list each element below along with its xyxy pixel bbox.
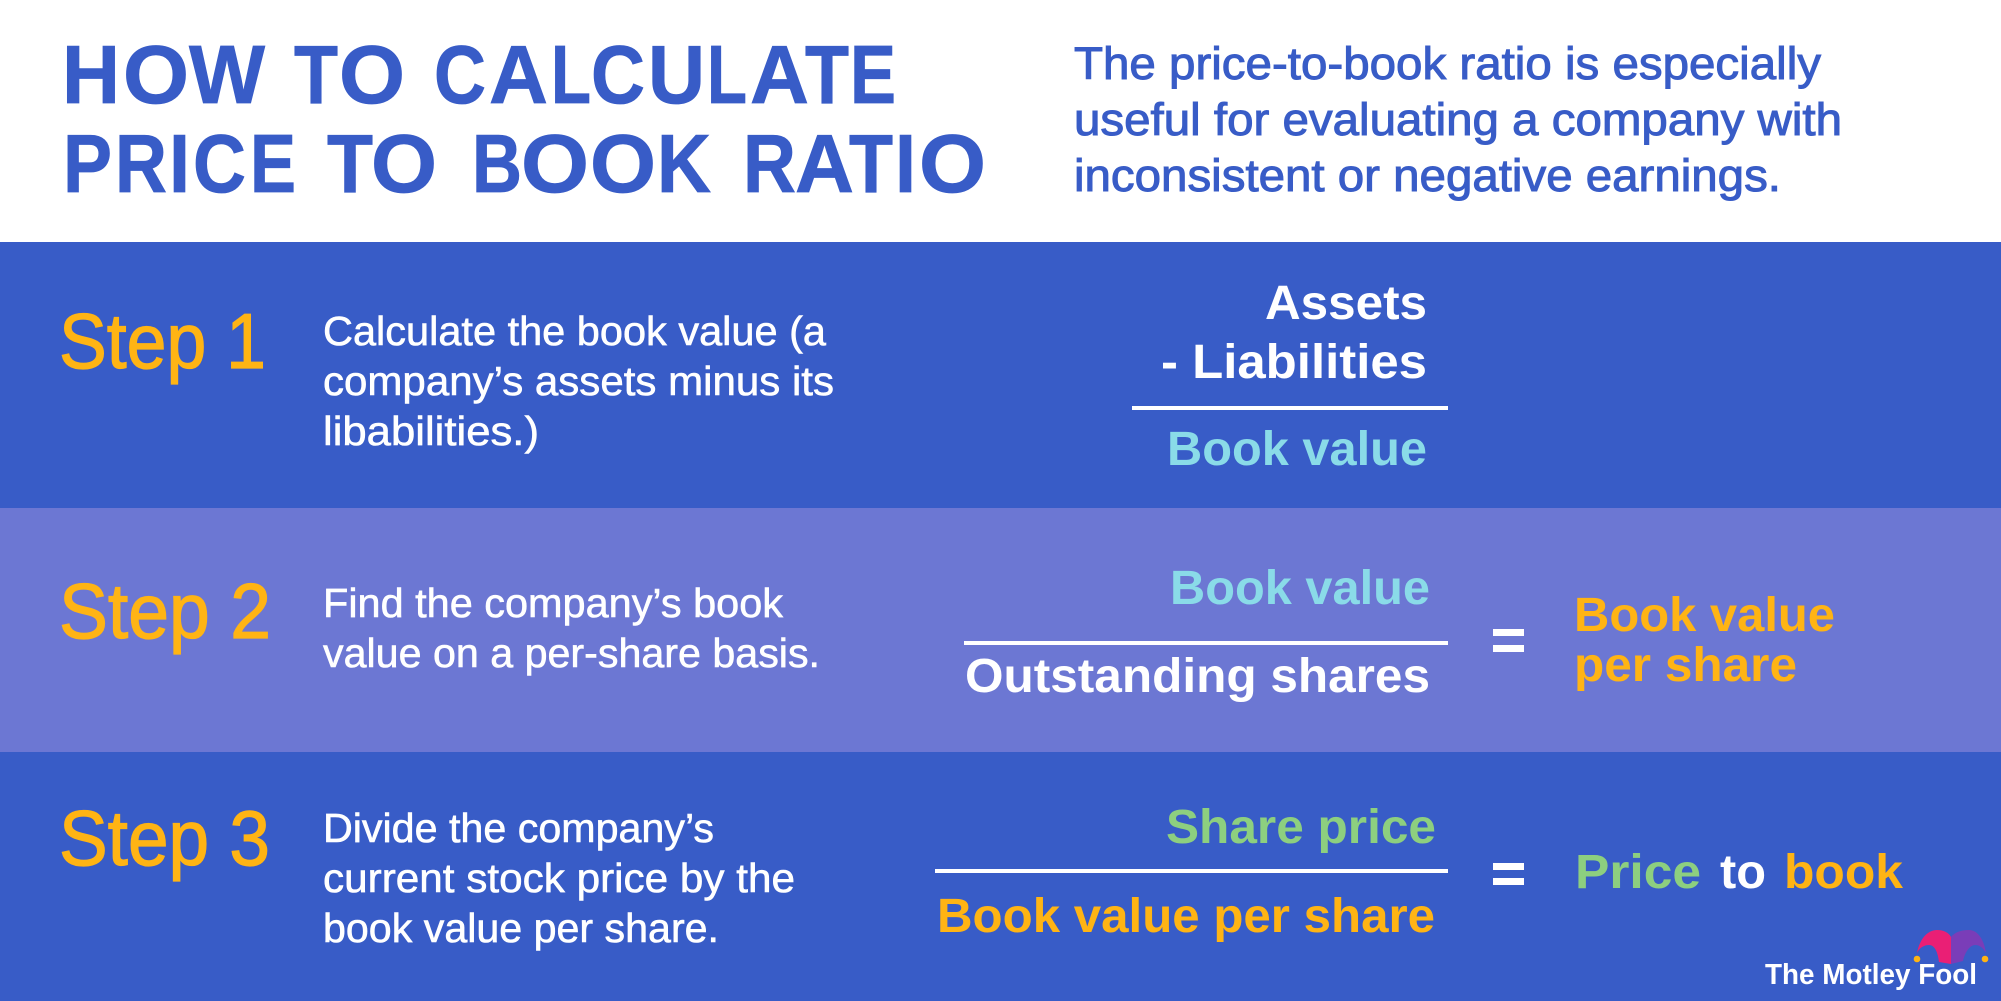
step 1 heading: Step 1 <box>59 297 266 385</box>
icon: jester hat <box>1914 930 1988 964</box>
step 3 description: current stock price by the <box>323 855 795 901</box>
title: R <box>743 117 796 210</box>
step 2 description: Find the company’s book <box>323 580 783 626</box>
step 3 description: book value per share. <box>323 905 719 951</box>
step 1 formula: Book value <box>1167 423 1427 476</box>
step 1 formula: Assets <box>1265 277 1427 330</box>
step 2 formula: Outstanding shares <box>965 650 1430 703</box>
step 3 result: Price <box>1575 846 1701 899</box>
title: C <box>591 28 645 121</box>
title: O <box>339 28 405 121</box>
title: R <box>115 117 167 210</box>
panel: step 2 <box>0 508 2001 752</box>
step 3 description: Divide the company’s <box>323 805 714 851</box>
panel: step 3 <box>0 752 2001 1001</box>
step 2 result: per share <box>1574 639 1797 692</box>
step 1 description <box>323 308 834 454</box>
step 3 formula <box>935 801 1448 943</box>
step 3 equals sign <box>1493 863 1524 885</box>
title: E <box>850 28 896 121</box>
title: O <box>919 117 986 210</box>
title: C <box>434 28 486 121</box>
title: A <box>750 28 809 121</box>
subtitle text: useful for evaluating a company with <box>1074 94 1842 145</box>
step 2 equals sign <box>1493 629 1524 652</box>
title: T <box>327 117 373 210</box>
step 2 heading: Step 2 <box>59 567 271 655</box>
title: I <box>895 117 916 210</box>
step 1 description: company’s assets minus its <box>323 358 834 404</box>
step 1 formula <box>1132 277 1448 476</box>
subtitle text <box>1074 38 1842 201</box>
title: T <box>849 117 893 210</box>
title: L <box>707 28 747 121</box>
step 3 result <box>1575 846 1903 899</box>
step 1 description: libabilities.) <box>323 408 539 454</box>
title: P <box>63 117 112 210</box>
title: B <box>472 117 522 210</box>
step 1 description: Calculate the book value (a <box>323 308 826 354</box>
step 3 formula: Share price <box>1166 801 1436 854</box>
title: O <box>371 117 437 210</box>
title <box>62 28 986 210</box>
title: O <box>521 117 589 210</box>
step 2 formula: Book value <box>1170 562 1430 615</box>
title: A <box>795 117 854 210</box>
title: T <box>294 28 338 121</box>
step 3 result: book <box>1784 846 1903 899</box>
step 2 description: value on a per-share basis. <box>323 630 820 676</box>
step 3 result: to <box>1720 846 1766 899</box>
step 3 description <box>323 805 795 951</box>
title: A <box>489 28 548 121</box>
step 3 formula: Book value per share <box>937 890 1435 943</box>
subtitle text: inconsistent or negative earnings. <box>1074 150 1781 201</box>
title: K <box>657 117 711 210</box>
logo: The Motley Fool <box>1765 930 1988 991</box>
title: L <box>551 28 591 121</box>
title: E <box>250 117 296 210</box>
step 2 result: Book value <box>1574 589 1835 642</box>
step 1 formula: - Liabilities <box>1161 336 1427 389</box>
step 2 description <box>323 580 820 676</box>
title: H <box>62 28 120 121</box>
title: O <box>123 28 189 121</box>
title: T <box>805 28 849 121</box>
title: C <box>193 117 246 210</box>
logo: The Motley Fool: The Motley Fool <box>1765 959 1977 991</box>
step 3 heading: Step 3 <box>59 794 270 882</box>
title: O <box>590 117 656 210</box>
title: I <box>169 117 190 210</box>
title: U <box>648 28 705 121</box>
panel: step 1 <box>0 242 2001 508</box>
step 2 formula <box>964 562 1448 703</box>
step 2 result <box>1574 589 1835 692</box>
title: W <box>189 28 266 121</box>
subtitle text: The price-to-book ratio is especially <box>1074 38 1822 89</box>
